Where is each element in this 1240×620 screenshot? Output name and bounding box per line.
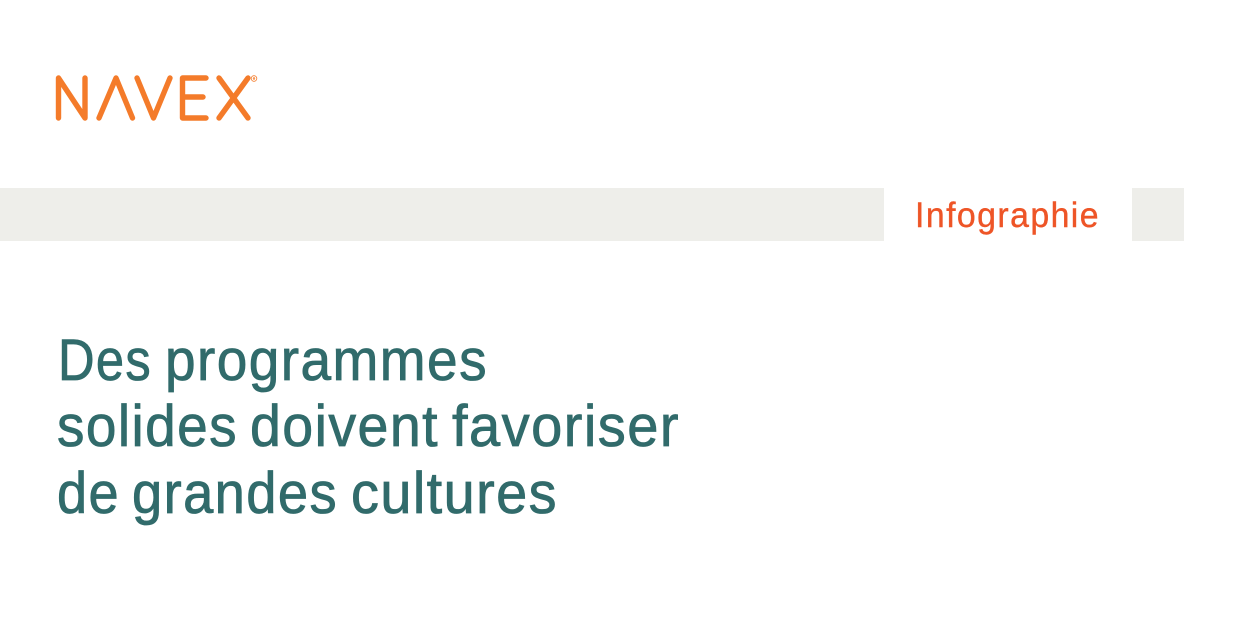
label: Infographie: Infographie: [915, 196, 1100, 235]
title: Des: [58, 328, 152, 393]
logo registered mark: [251, 76, 257, 81]
title: favoriser: [452, 394, 680, 459]
logo letter X: [219, 78, 248, 118]
logo letter Lambda A: [99, 78, 132, 118]
title: solides: [57, 394, 238, 459]
title: programmes: [165, 328, 488, 393]
logo: NAVEX: [58, 76, 257, 118]
title: [57, 328, 680, 526]
logo letter V: [137, 78, 170, 118]
title: de: [57, 461, 120, 526]
banner bar right: [1132, 188, 1184, 241]
logo letter N: [58, 78, 85, 118]
title: grandes: [132, 461, 338, 526]
logo letter E: [182, 78, 206, 118]
title: doivent: [250, 394, 439, 459]
banner bar left: [0, 188, 884, 241]
title: cultures: [351, 461, 558, 526]
